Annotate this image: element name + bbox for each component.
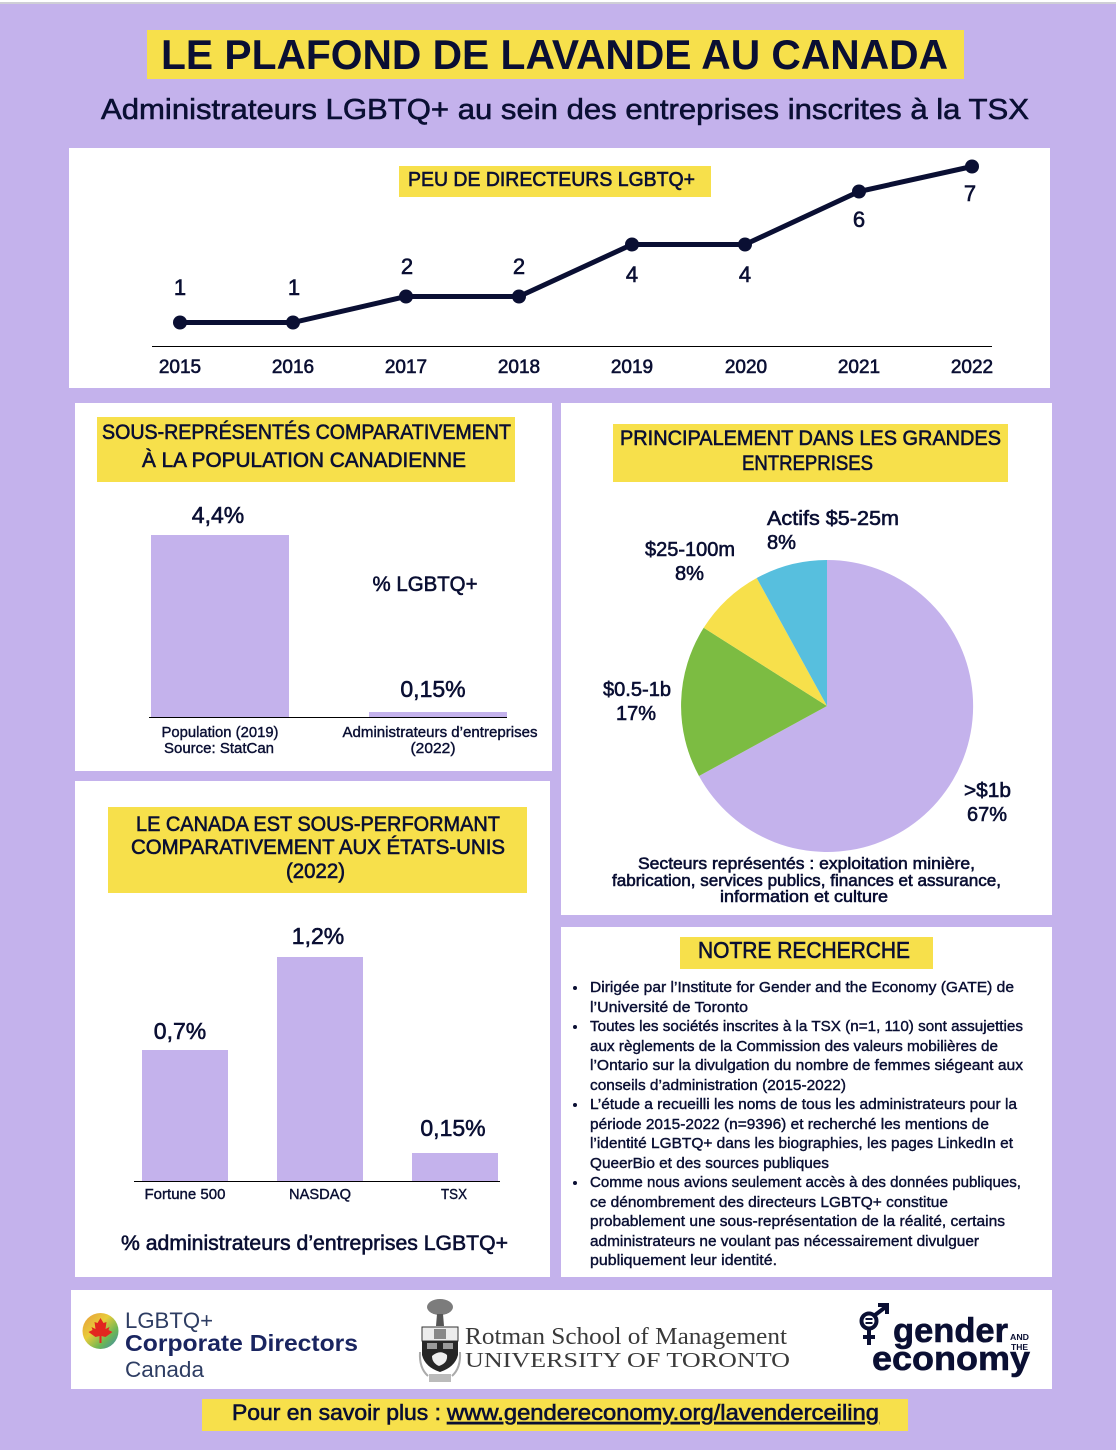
bullet list: QueerBio et des sources publiques — [590, 1155, 829, 1172]
bullet list: aux règlements de la Commission des valeurs mobilières de — [590, 1038, 998, 1055]
line chart: 4 — [739, 262, 751, 287]
logo: LGBTQ+ Corporate Directors Canada: Canada — [125, 1357, 205, 1382]
bar chart: 0,7% — [154, 1018, 206, 1044]
line chart: 1 — [174, 275, 186, 300]
logo: gender and the economy: economy — [872, 1340, 1030, 1378]
bar chart: TSX — [441, 1186, 467, 1203]
pie labels: 8% — [675, 563, 704, 585]
bar chart — [134, 923, 500, 1203]
heading: peu de directeurs — [399, 166, 711, 197]
subtitle: Administrateurs LGBTQ+ au sein des entreprises inscrites à la TSX — [101, 94, 1029, 126]
heading: sous-représentés: SOUS-REPRÉSENTÉS COMPARATIVEMENT — [102, 421, 511, 444]
sectors note: Secteurs représentés : exploitation minière, — [638, 854, 975, 873]
call to action link: Pour en savoir plus : — [232, 1400, 441, 1425]
pie labels — [603, 508, 1011, 826]
panel: population comparison — [75, 403, 552, 771]
bullet list: Dirigée par l’Institute for Gender and the Economy (GATE) de — [590, 979, 1014, 996]
bar chart: Fortune 500 — [144, 1186, 226, 1203]
panel: line chart of LGBTQ+ directors — [69, 148, 1050, 388]
line chart: 7 — [964, 181, 976, 206]
panel: notre recherche — [561, 927, 1052, 1277]
panel: company size pie — [561, 403, 1052, 915]
heading: sous-performant: (2022) — [286, 860, 345, 883]
bar chart: % LGBTQ+ — [372, 573, 478, 596]
logo: gender and the economy — [862, 1305, 1030, 1378]
line chart: 6 — [853, 207, 865, 232]
line chart: 2017 — [385, 357, 427, 378]
bar chart: Population (2019) — [162, 724, 279, 741]
pie labels: >$1b — [964, 780, 1011, 802]
bar chart: 0,15% — [400, 676, 466, 702]
heading: sous-représentés: À LA POPULATION CANADIENNE — [142, 449, 466, 472]
line chart: 2 — [401, 254, 413, 279]
line chart: 1 — [288, 275, 300, 300]
bar chart: 0,15% — [420, 1115, 486, 1141]
title: LE PLAFOND DE LAVANDE AU CANADA — [161, 31, 948, 78]
bullet list: administrateurs ne voulant pas nécessairement divulguer — [590, 1233, 979, 1250]
heading: sous-performant: COMPARATIVEMENT AUX ÉTATS-UNIS — [131, 836, 505, 859]
bar chart: 1,2% — [292, 923, 344, 949]
bullet list: l’Université de Toronto — [590, 999, 748, 1016]
bullet list: l’Ontario sur la divulgation du nombre de femmes siégeant aux — [590, 1057, 1024, 1074]
pie labels: 8% — [767, 532, 796, 554]
bar chart: Administrateurs d’entreprises — [342, 724, 538, 741]
logo: gender and the economy: THE — [1011, 1343, 1029, 1352]
pie labels: 17% — [616, 703, 656, 725]
pie chart — [681, 560, 973, 852]
heading: sous-performant: LE CANADA EST SOUS-PERFORMANT — [136, 813, 500, 836]
heading: grandes entreprises: ENTREPRISES — [742, 452, 873, 475]
line chart: 2022 — [951, 357, 993, 378]
logo: LGBTQ+ Corporate Directors Canada: LGBTQ+ — [125, 1308, 213, 1333]
bar chart: NASDAQ — [289, 1186, 351, 1203]
bullet list: publiquement leur identité. — [590, 1252, 777, 1269]
bullet list: l’identité LGBTQ+ dans les biographies, les pages LinkedIn et — [590, 1135, 1014, 1152]
line chart: 2019 — [611, 357, 653, 378]
sectors note: information et culture — [720, 887, 888, 906]
line chart: 2021 — [838, 357, 880, 378]
pie labels: $0.5-1b — [603, 679, 671, 701]
sectors note: fabrication, services publics, finances et assurance, — [612, 871, 1001, 890]
logo: Rotman School of Management — [420, 1299, 790, 1382]
bullet list: probablement une sous-représentation de la réalité, certains — [590, 1213, 1005, 1230]
line chart: 2020 — [725, 357, 767, 378]
bullet list — [573, 979, 1024, 1269]
call to action link — [202, 1399, 908, 1431]
pie labels: $25-100m — [645, 539, 735, 561]
logo: gender and the economy: gender — [893, 1312, 1008, 1350]
heading: grandes entreprises — [613, 424, 1008, 482]
bullet list: L’étude a recueilli les noms de tous les administrateurs pour la — [590, 1096, 1018, 1113]
pie labels: 67% — [967, 804, 1007, 826]
pie labels: Actifs $5-25m — [767, 508, 899, 530]
bullet list: Toutes les sociétés inscrites à la TSX (n=1, 110) sont assujetties — [590, 1018, 1023, 1035]
line chart: 4 — [626, 262, 638, 287]
logo: gender and the economy: AND — [1010, 1333, 1029, 1342]
logo: LGBTQ+ Corporate Directors Canada: Corporate Directors — [125, 1330, 358, 1356]
panel: US comparison — [75, 781, 550, 1277]
sectors note — [612, 854, 1001, 906]
bar chart: 4,4% — [192, 502, 244, 528]
logo: Rotman School of Management: Rotman School of Management — [465, 1324, 787, 1350]
bar chart: Source: StatCan — [164, 740, 274, 757]
line chart: 2 — [513, 254, 525, 279]
line chart: 2016 — [272, 357, 314, 378]
call to action link: www.gendereconomy.org/lavenderceiling — [446, 1400, 879, 1425]
line chart: 2018 — [498, 357, 540, 378]
logo: Rotman School of Management: UNIVERSITY OF TORONTO — [465, 1348, 790, 1372]
heading: peu de directeurs: PEU DE DIRECTEURS LGBTQ+ — [408, 169, 695, 191]
bar chart — [149, 502, 538, 757]
line chart: 2015 — [159, 357, 201, 378]
panel: logos — [71, 1290, 1052, 1389]
bar chart: (2022) — [410, 740, 456, 757]
bullet list: ce dénombrement des directeurs LGBTQ+ constitue — [590, 1194, 948, 1211]
bullet list: conseils d’administration (2015-2022) — [590, 1077, 846, 1094]
heading: notre recherche: NOTRE RECHERCHE — [698, 937, 910, 963]
logo: LGBTQ+ Corporate Directors Canada — [82, 1308, 358, 1382]
heading: sous-performant — [108, 807, 527, 893]
line chart — [152, 160, 993, 378]
heading: sous-représentés — [97, 417, 515, 482]
bullet list: Comme nous avions seulement accès à des données publiques, — [590, 1174, 1021, 1191]
heading: grandes entreprises: PRINCIPALEMENT DANS LES GRANDES — [620, 427, 1001, 450]
bullet list: période 2015-2022 (n=9396) et recherché les mentions de — [590, 1116, 989, 1133]
chart caption: % administrateurs d’entreprises LGBTQ+ — [121, 1232, 508, 1255]
